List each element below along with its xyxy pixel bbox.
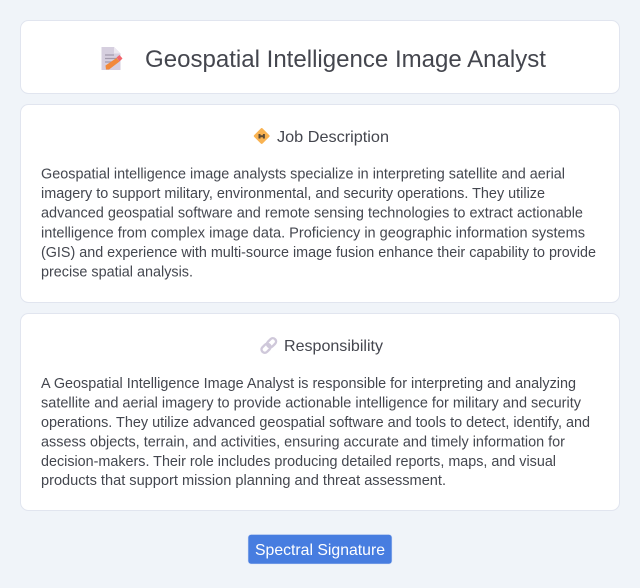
- icon: orange diamond: [253, 128, 270, 144]
- text block: job description: intelligence from complex image data. Proficiency in geographic information systems: [41, 225, 585, 241]
- heading: responsibility: Responsibility: [284, 338, 383, 355]
- text block: job description: precise spatial analysis.: [41, 265, 193, 281]
- text block: job description: imagery to support military, environmental, and security operations. They utilize: [41, 186, 545, 202]
- text block: responsibility: operations. They utilize advanced geospatial software and tools to detect, identify, and: [41, 415, 590, 431]
- text block: responsibility: decision-makers. Their role includes producing detailed reports, maps, and visual: [41, 454, 556, 470]
- text block: job description: advanced geospatial software and remote sensing technologies to extract actionable: [41, 206, 583, 222]
- text block: responsibility: satellite and aerial imagery to provide actionable intelligence for military and security: [41, 396, 582, 412]
- text block: responsibility: [41, 376, 590, 489]
- text block: job description: (GIS) and experience with multi-source image fusion enhance their capability to provide: [41, 245, 596, 261]
- text block: responsibility: A Geospatial Intelligence Image Analyst is responsible for interpreting and analyzing: [41, 376, 576, 392]
- panel: responsibility: [20, 314, 620, 510]
- heading: job description: Job Description: [277, 129, 389, 146]
- text block: job description: [41, 166, 596, 281]
- panel: job description: [20, 104, 620, 302]
- text block: responsibility: products that support mission planning and threat assessment.: [41, 473, 446, 489]
- panel: title card: [20, 20, 620, 94]
- button: spectral signature: Spectral Signature: [255, 542, 385, 559]
- title: Geospatial Intelligence Image Analyst: [145, 46, 546, 73]
- icon: chain link: [260, 337, 277, 354]
- icon: document with pencil: [102, 47, 122, 70]
- text block: responsibility: assess objects, terrain, and activities, ensuring accurate and timely information for: [41, 434, 565, 450]
- text block: job description: Geospatial intelligence image analysts specialize in interpreting satellite and aerial: [41, 166, 565, 182]
- button: spectral signature: [248, 534, 392, 564]
